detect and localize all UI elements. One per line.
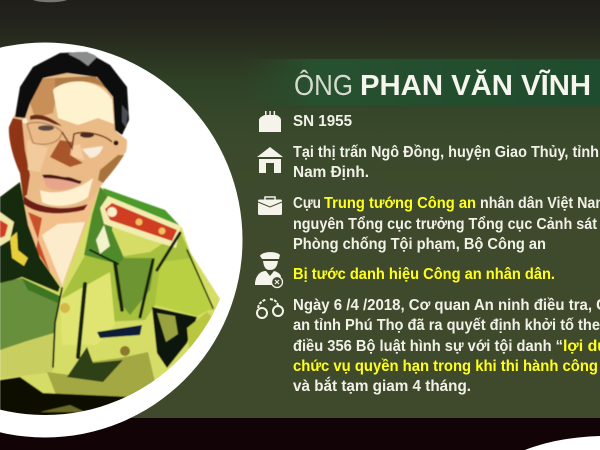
- left epaulette: [0, 212, 14, 246]
- neck: [24, 186, 100, 287]
- icon: house: [257, 147, 283, 173]
- text: career: Trung tướng Công an: [324, 195, 476, 212]
- glasses and brows: [30, 115, 62, 126]
- footer band: [0, 418, 600, 450]
- text: prosecution: điều 356 Bộ luật hình sự với tội danh “: [293, 338, 563, 355]
- pocket flap: [97, 325, 142, 338]
- collar pin: [10, 232, 28, 266]
- left shirt panel: [0, 278, 60, 352]
- left lower light panel: [0, 333, 54, 378]
- arm shadow: [152, 307, 197, 368]
- text: prosecution: và bắt tạm giam 4 tháng.: [293, 376, 471, 395]
- text: birth year: SN 1955: [293, 113, 352, 130]
- text: career: [293, 195, 600, 253]
- text: birthplace: [293, 144, 599, 181]
- text: prosecution: [293, 297, 600, 395]
- jaw shadow: [23, 195, 88, 213]
- right chest green: [62, 232, 214, 330]
- title: ÔNG: [294, 68, 353, 102]
- nose: [50, 140, 83, 167]
- temple shading: [29, 77, 56, 116]
- title: PHAN VĂN VĨNH: [360, 68, 591, 102]
- forehead highlight: [53, 81, 114, 125]
- hair: [15, 52, 129, 135]
- text: birthplace: Nam Định.: [293, 164, 369, 181]
- chin highlight: [40, 178, 93, 206]
- bottom right arc: [525, 436, 600, 450]
- left cheek shadow: [9, 118, 30, 197]
- uniform body: [0, 182, 220, 394]
- text: status: Bị tước danh hiệu Công an nhân dân.: [293, 266, 555, 283]
- icon: briefcase: [258, 197, 282, 215]
- uniform left dark panel: [0, 182, 60, 292]
- collar green highlight: [103, 188, 180, 226]
- mouth: [43, 177, 80, 190]
- eyes: [38, 125, 54, 131]
- title band: [240, 59, 600, 105]
- text: career: Phòng chống Tội phạm, Bộ Công an: [293, 236, 546, 253]
- right cheek highlight: [82, 146, 103, 158]
- uniform fold lines: [53, 233, 213, 367]
- icon: birthday cake: [259, 111, 281, 132]
- portrait circle: [0, 42, 242, 438]
- lower shadow: [47, 352, 155, 398]
- icon: police officer with cross badge: [255, 252, 282, 288]
- buttons: [60, 303, 70, 313]
- right shoulder epaulette: [100, 196, 181, 248]
- lapel: [84, 187, 124, 264]
- right lower cheek shadow: [98, 155, 124, 183]
- text: career: Cựu: [293, 195, 321, 212]
- top arc: [33, 0, 67, 2]
- icon: handcuffs: [257, 299, 283, 318]
- face: [9, 72, 127, 210]
